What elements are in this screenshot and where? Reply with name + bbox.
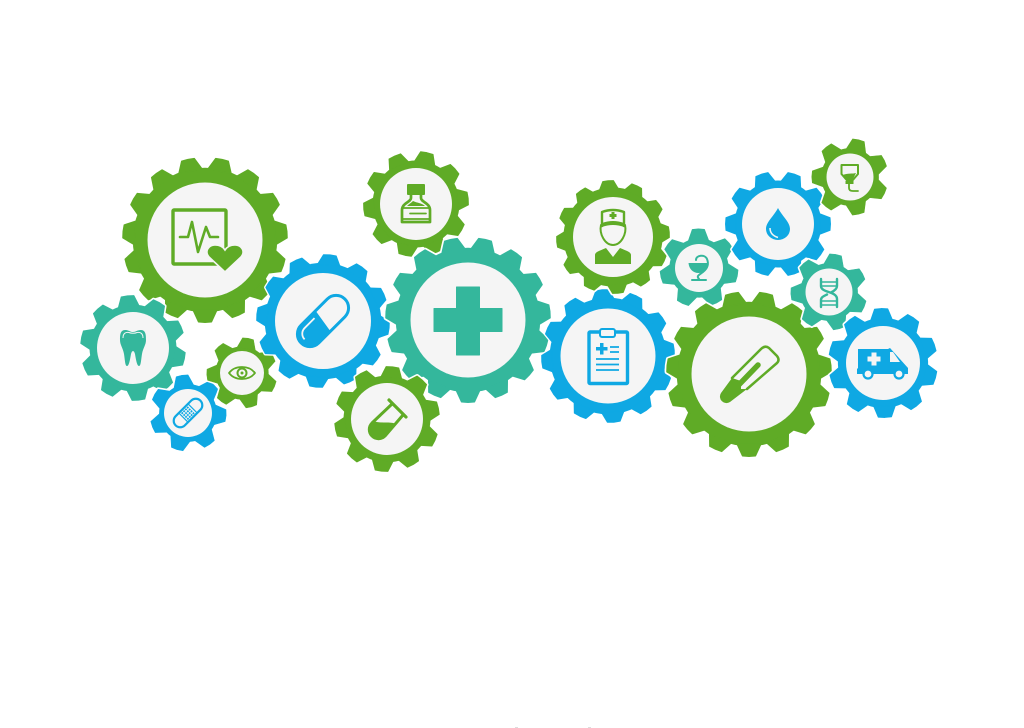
gear: heart monitor [122,157,288,322]
icon: medical cross [434,287,502,355]
gear: nurse [552,176,674,298]
icon: heart monitor [173,210,243,272]
gear: clipboard [536,284,680,428]
icon: clipboard [589,329,628,384]
icon: dna [821,279,837,307]
icon: ambulance [857,348,908,378]
gear: ambulance [826,307,940,419]
icon: medicine bottle [402,184,430,222]
gear: test tube [329,361,445,477]
gear: dna [783,248,874,337]
icon: tooth [120,330,146,366]
icon: test tube [369,400,406,439]
gear: capsule [250,248,396,394]
icon: capsule [292,290,354,352]
gear: medicine bottle [353,142,479,266]
icon: iv bag [842,165,858,191]
gear: water drop [711,158,845,290]
icon: nurse [595,210,631,264]
icon: bandage [171,396,205,430]
icon: water drop [766,208,790,240]
gear: bandage [143,369,233,457]
icon: eye [229,367,255,379]
gear: caduceus [658,228,740,308]
icon: caduceus [688,256,708,280]
gear: medical cross [385,237,551,402]
icon: thermometer [720,347,778,403]
gear: thermometer [666,291,832,456]
gear: tooth [75,290,191,406]
gear: iv bag [803,131,897,224]
gear: eye [200,332,284,414]
